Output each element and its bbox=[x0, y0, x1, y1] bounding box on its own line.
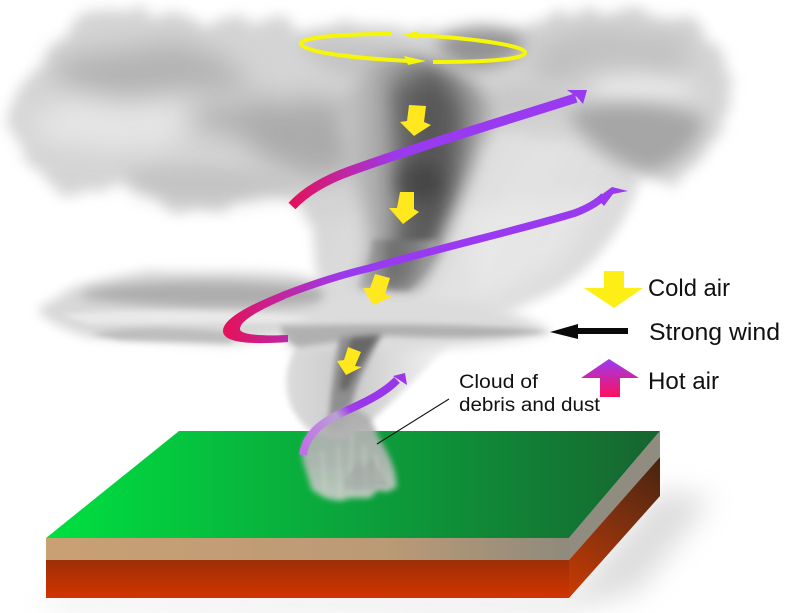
callout label: Cloud of bbox=[459, 372, 539, 393]
spiral arrow: middle bbox=[223, 187, 628, 343]
callout label bbox=[459, 372, 601, 416]
funnel sharp lower portion bbox=[358, 240, 438, 291]
legend: hot air: Hot air bbox=[648, 368, 719, 395]
spiral arrow: lower bbox=[303, 373, 407, 455]
dark central funnel bbox=[337, 59, 491, 291]
right side soil bbox=[569, 431, 660, 560]
spiral arrow: upper bbox=[292, 90, 587, 206]
upper cloud mass bbox=[8, 8, 730, 228]
legend: strong wind bbox=[550, 319, 780, 346]
swirling ring arrow at top bbox=[301, 31, 525, 65]
right lobe lower dark bbox=[565, 104, 705, 172]
ground block bbox=[46, 431, 712, 612]
right lobe light bbox=[590, 77, 700, 103]
dark disc streak bbox=[280, 324, 552, 347]
middle flat cloud bbox=[37, 270, 552, 350]
grass surface bbox=[46, 431, 660, 538]
right lobe upper bbox=[530, 29, 697, 85]
callout leader line bbox=[377, 399, 449, 444]
legend: cold air: Cold air bbox=[648, 275, 730, 302]
legend: cold air bbox=[584, 271, 730, 308]
lower narrow funnel bbox=[328, 333, 383, 432]
upper dark streak bbox=[80, 282, 325, 308]
central-left dark band bbox=[185, 96, 365, 175]
light middle band bbox=[30, 101, 192, 155]
top centre shade bbox=[300, 39, 440, 85]
lower dark streak bbox=[90, 328, 240, 343]
lower left shade bbox=[125, 165, 300, 202]
pale lower funnel bbox=[286, 340, 453, 440]
debris cloud bbox=[302, 405, 396, 501]
red rock layer bbox=[46, 560, 569, 598]
right part of the disc bbox=[285, 296, 552, 350]
tan soil layer bbox=[46, 538, 569, 560]
legend: strong wind: Strong wind bbox=[649, 319, 780, 346]
upper dark band bbox=[50, 43, 248, 95]
light streak bbox=[60, 311, 340, 324]
callout label: debris and dust bbox=[459, 395, 601, 416]
cold air arrows in funnel bbox=[337, 105, 431, 375]
right side rock bbox=[569, 457, 660, 598]
ground shadow bbox=[46, 490, 712, 612]
pale outer funnel bbox=[286, 91, 640, 440]
legend: hot air bbox=[581, 359, 719, 397]
